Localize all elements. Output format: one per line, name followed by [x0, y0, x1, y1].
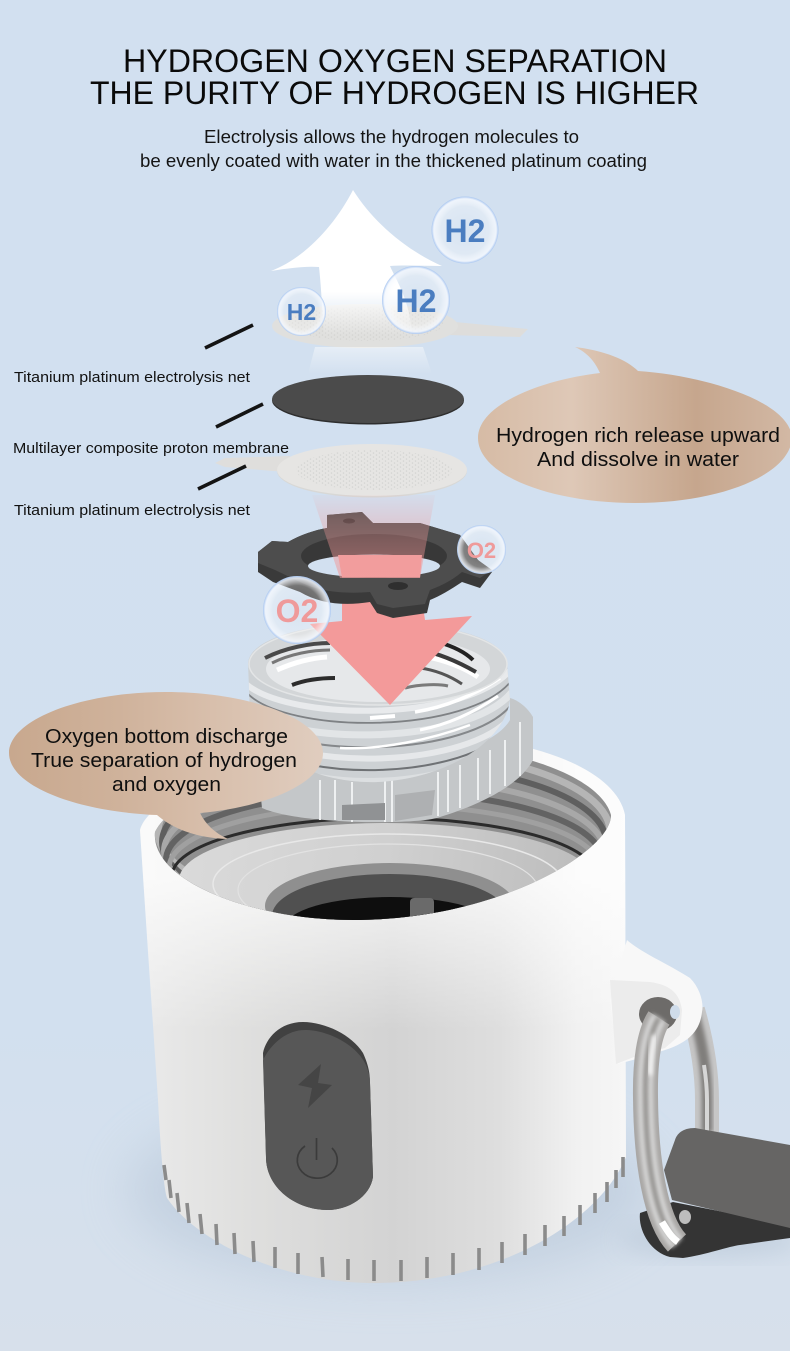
vent slots: [164, 1157, 623, 1281]
threaded cylinder: [248, 629, 510, 782]
bubble: H2 middle: [382, 266, 450, 334]
bubble: H2 small: [277, 287, 326, 336]
transparent threaded cartridge: [240, 620, 533, 822]
callout: hydrogen release: Hydrogen rich release upward: [496, 425, 780, 447]
bubble: H2 middle: H2: [396, 283, 436, 319]
component labels: Titanium platinum electrolysis net: [14, 369, 251, 386]
flange: [255, 698, 533, 822]
clip strap: [640, 1128, 790, 1258]
subtitle: Electrolysis allows the hydrogen molecules to: [204, 127, 579, 147]
black seal ring: [258, 512, 492, 618]
component labels: [13, 369, 289, 519]
callout: oxygen discharge: and oxygen: [112, 774, 221, 796]
front of ring: [645, 1018, 678, 1243]
subtitle: be evenly coated with water in the thickened platinum coating: [140, 151, 647, 171]
title: THE PURITY OF HYDROGEN IS HIGHER: [90, 75, 699, 111]
subtitle: [140, 127, 647, 171]
bubble: O2 large: [263, 576, 331, 644]
oxygen arrow: fading upper section: [312, 495, 435, 578]
oxygen bubbles: [263, 525, 506, 644]
hydrogen bubbles: [277, 196, 498, 336]
electrolysis net: upper: [272, 304, 528, 348]
component labels: Multilayer composite proton membrane: [13, 440, 289, 457]
bubble: O2 large: O2: [276, 593, 318, 629]
ring lug: [610, 940, 702, 1064]
back of keyring: [693, 1010, 707, 1132]
arrow: hydrogen rising: [271, 190, 442, 374]
callout: oxygen discharge: Oxygen bottom discharge: [45, 726, 288, 748]
bubble: H2 top: [432, 196, 498, 264]
callout: hydrogen release: [478, 347, 790, 503]
electrolysis net: lower: [215, 444, 467, 498]
rim highlight: [140, 735, 626, 1084]
arrow: oxygen discharge: [310, 585, 472, 705]
icon: power: [297, 1138, 337, 1178]
top lip: [249, 623, 507, 705]
callout: oxygen discharge: True separation of hydrogen: [31, 750, 297, 772]
central opening: [265, 863, 509, 916]
cup body: [140, 735, 626, 1283]
inner thread: [265, 636, 490, 702]
cup shadow: [128, 1098, 790, 1282]
cup interior: [154, 760, 611, 920]
leader lines: [198, 325, 263, 489]
bubble: H2 top: H2: [445, 213, 485, 249]
keyring and clip: [640, 1018, 790, 1258]
floor ring: [180, 823, 577, 912]
bubble: O2 small: O2: [467, 538, 496, 563]
bubble: H2 small: H2: [287, 299, 316, 325]
callout: oxygen discharge: [9, 692, 323, 839]
bubble: O2 small: [457, 525, 506, 574]
title: [90, 43, 699, 111]
cup: [140, 730, 630, 1283]
proton membrane disc: [272, 375, 464, 424]
title: HYDROGEN OXYGEN SEPARATION: [123, 43, 667, 79]
component labels: Titanium platinum electrolysis net: [14, 502, 251, 519]
callout: hydrogen release: And dissolve in water: [537, 449, 739, 471]
icon: lightning bolt: [298, 1064, 332, 1108]
control button: [263, 1022, 373, 1210]
